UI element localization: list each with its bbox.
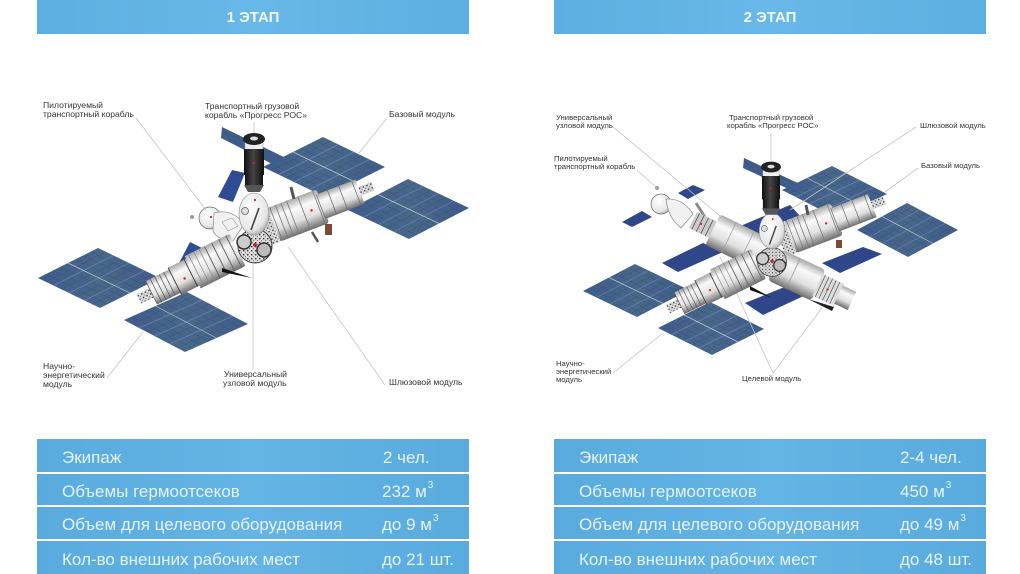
row: target equipment volume xyxy=(37,507,469,539)
solar panel: science module left xyxy=(583,264,689,317)
dark solar panel: target module lower xyxy=(745,282,812,315)
label: science module: модуль xyxy=(43,379,73,389)
leader: universal node xyxy=(252,264,254,370)
crew transport ship xyxy=(651,186,693,228)
row: crew: 2-4 чел. xyxy=(900,448,962,466)
crew transport ship xyxy=(190,207,244,241)
label: science module: модуль xyxy=(556,375,582,384)
dark solar panel: crew ship right xyxy=(678,185,705,199)
label: base module: Базовый модуль xyxy=(389,109,456,119)
solar strip behind Progress xyxy=(743,158,800,192)
leader: airlock xyxy=(790,127,916,210)
leader: base module xyxy=(885,168,918,192)
label: Progress: Транспортный грузовой xyxy=(205,101,299,111)
grey arm xyxy=(696,203,708,222)
black radiator: target module xyxy=(808,299,834,311)
leader: science module xyxy=(107,332,143,378)
dark solar panel: upper back xyxy=(738,205,800,240)
leader: Progress xyxy=(253,122,255,133)
label: Progress: Транспортный грузовой xyxy=(729,113,813,122)
leader: crew ship xyxy=(136,118,206,210)
row: external workplaces: до 21 шт. xyxy=(382,550,454,568)
label: airlock: Шлюзовой модуль xyxy=(920,121,986,130)
target module lower right xyxy=(768,250,859,316)
row: crew xyxy=(554,439,986,472)
label: crew ship: Пилотируемый xyxy=(43,100,103,110)
stage 1 station xyxy=(38,100,469,389)
leader: crew ship xyxy=(637,170,657,188)
row: pressurized volume xyxy=(37,474,469,505)
label: base module: Базовый модуль xyxy=(921,161,980,170)
black radiator xyxy=(222,268,252,278)
row: target equipment volume: Объем для целевого оборудования xyxy=(579,515,859,534)
label: science module: Научно- xyxy=(43,361,75,371)
solar panel: base module right xyxy=(857,203,958,257)
target module upper left xyxy=(686,205,772,270)
heading: stage 1 xyxy=(37,0,469,34)
solar panel: science module right xyxy=(658,302,764,355)
dark solar panel: target module right xyxy=(822,247,882,273)
science module xyxy=(661,249,766,324)
table: stage 1 xyxy=(37,439,469,574)
label: airlock module: Шлюзовой модуль xyxy=(389,377,463,387)
row: pressurized volume: Объемы гермоотсеков xyxy=(62,482,240,500)
leader: target module xyxy=(720,257,822,373)
solar panel: base module left xyxy=(782,166,887,218)
Progress cargo ship xyxy=(243,133,265,192)
dark arm on base module xyxy=(291,187,294,199)
label: target module: Целевой модуль xyxy=(742,374,801,383)
dark arm on base module xyxy=(806,205,808,215)
label: crew ship: транспортный корабль xyxy=(554,162,635,171)
row: external workplaces xyxy=(37,541,469,574)
solar panel: base module left xyxy=(263,137,385,197)
small solar panel: crew ship bottom xyxy=(177,242,202,267)
dark solar panel: target module left xyxy=(662,243,723,272)
brown cargo unit xyxy=(325,224,332,235)
row: target equipment volume: Объем для целевого оборудования xyxy=(62,515,342,534)
solar panel: base module right xyxy=(348,179,469,239)
label: universal node: узловой модуль xyxy=(556,121,613,130)
label: crew ship: транспортный корабль xyxy=(43,109,134,119)
universal node module xyxy=(757,248,786,276)
base module xyxy=(774,185,891,257)
stage 2 station xyxy=(554,113,986,384)
label: science module: энергетический xyxy=(43,370,105,380)
label: universal node: Универсальный xyxy=(556,113,612,122)
gateway core module xyxy=(239,193,269,235)
row: target equipment volume: до 9 м3 xyxy=(382,513,439,534)
solar panel: science module left xyxy=(38,248,160,308)
lower arm on base module xyxy=(312,232,318,242)
row: external workplaces: до 48 шт. xyxy=(900,550,972,568)
solar panel: science module right xyxy=(124,292,248,352)
row: crew xyxy=(37,439,469,472)
row: pressurized volume: Объемы гермоотсеков xyxy=(579,482,757,500)
row: target equipment volume: до 49 м3 xyxy=(900,513,966,534)
label: universal node: узловой модуль xyxy=(223,378,287,388)
heading: stage 1: 1 ЭТАП xyxy=(227,9,279,26)
row: crew: Экипаж xyxy=(62,448,121,466)
row: crew: 2 чел. xyxy=(383,448,430,466)
base module xyxy=(257,170,380,246)
heading: stage 2: 2 ЭТАП xyxy=(744,9,796,26)
Progress cargo ship xyxy=(761,162,781,215)
row: crew: Экипаж xyxy=(579,448,638,466)
label: Progress: корабль «Прогресс РОС» xyxy=(205,110,307,120)
row: external workplaces: Кол-во внешних рабочих мест xyxy=(62,550,300,568)
leader: universal node xyxy=(613,127,725,220)
leader: science module xyxy=(613,333,663,373)
brown cargo unit xyxy=(836,240,842,248)
row: external workplaces: Кол-во внешних рабочих мест xyxy=(579,550,817,568)
row: pressurized volume xyxy=(554,474,986,505)
small solar panel: crew ship top xyxy=(218,170,245,202)
black radiator xyxy=(750,286,772,298)
label: crew ship: Пилотируемый xyxy=(554,154,608,163)
leader: base module xyxy=(359,118,387,153)
label: science module: Научно- xyxy=(556,359,585,368)
leader: Progress xyxy=(770,133,772,161)
row: pressurized volume: 232 м3 xyxy=(382,480,433,500)
label: Progress: корабль «Прогресс РОС» xyxy=(727,121,818,130)
heading: stage 2 xyxy=(554,0,986,34)
label: science module: энергетический xyxy=(556,367,611,376)
solar strip behind Progress xyxy=(221,127,290,170)
label: universal node: Универсальный xyxy=(224,369,287,379)
gateway core module xyxy=(759,213,785,249)
row: external workplaces xyxy=(554,541,986,574)
row: pressurized volume: 450 м3 xyxy=(900,480,951,500)
universal node module xyxy=(237,229,272,263)
table: stage 2 xyxy=(554,439,986,574)
row: target equipment volume xyxy=(554,507,986,539)
leader: airlock module xyxy=(288,247,385,385)
science module xyxy=(131,234,245,315)
dark solar panel: crew ship left xyxy=(622,211,652,227)
